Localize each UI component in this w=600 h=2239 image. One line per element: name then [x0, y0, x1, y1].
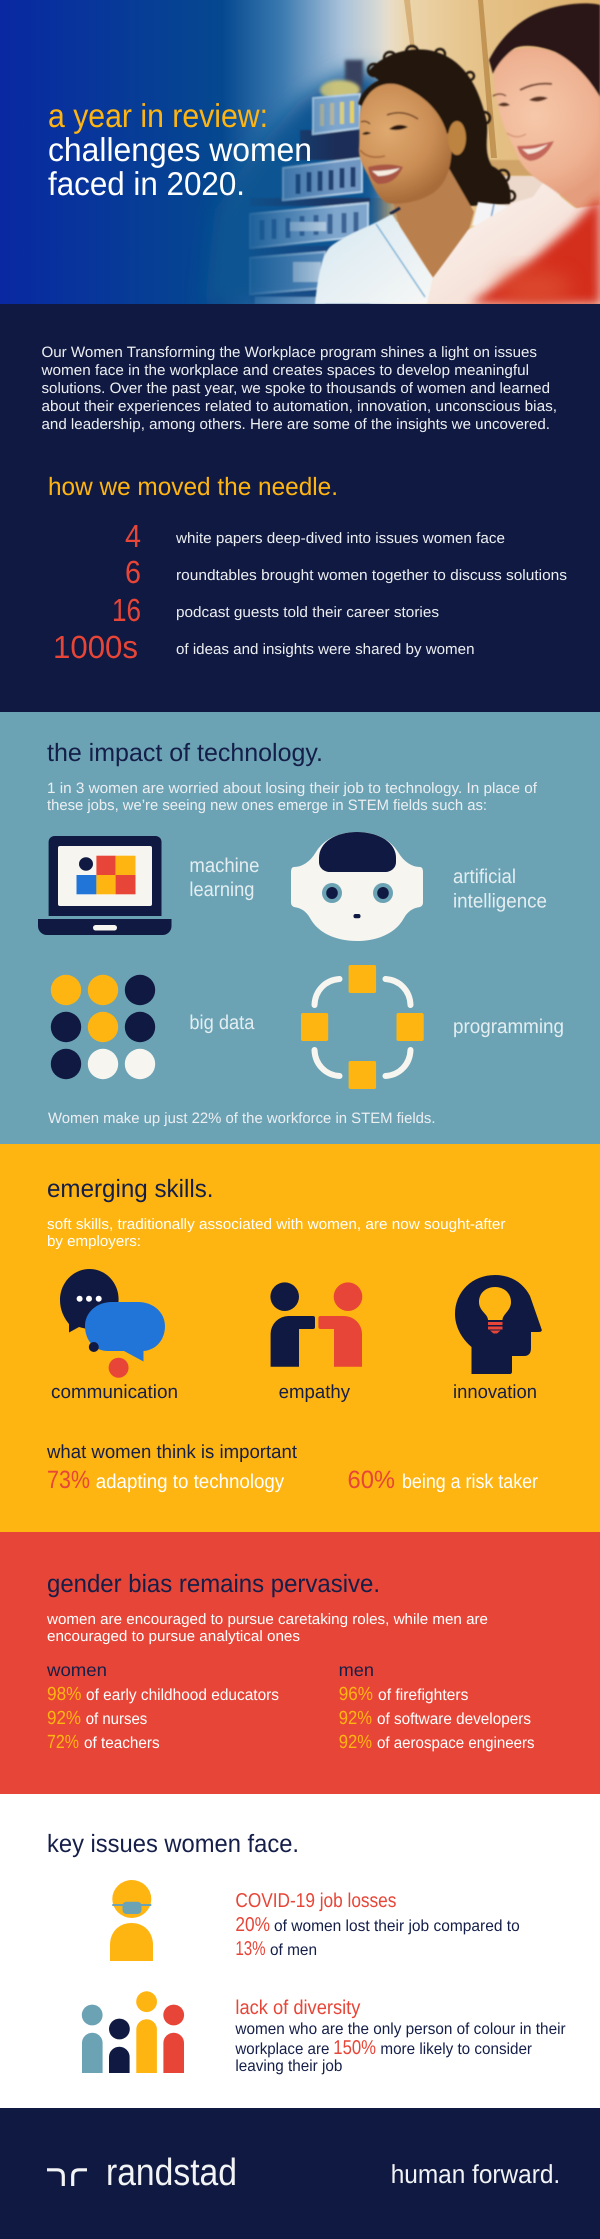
logo mark — [47, 2170, 87, 2186]
stat: being a risk taker: 60% — [348, 1466, 395, 1494]
stat list: 16 — [112, 592, 141, 628]
stat list: of ideas and insights were shared by women — [176, 641, 474, 658]
column: men: 92% — [339, 1708, 372, 1729]
panel: hero — [0, 0, 600, 306]
red foreground blur — [470, 196, 600, 306]
icon: head with light bulb — [455, 1275, 542, 1374]
stat: adapting to technology: 73% — [47, 1466, 90, 1494]
column: men: 96% — [339, 1684, 373, 1705]
stat: being a risk taker: being a risk taker — [402, 1471, 538, 1493]
text: covid-19 job losses: of men — [270, 1942, 317, 1959]
label: artificial intelligence: intelligence — [453, 890, 547, 912]
stat list: 1000s — [53, 629, 138, 665]
column: women: women — [46, 1660, 107, 1680]
stat list: 6 — [125, 554, 141, 590]
intro paragraph: and leadership, among others. Here are some of the insights we uncovered. — [42, 416, 550, 433]
label: communication: communication — [51, 1382, 178, 1403]
label: programming: programming — [453, 1016, 564, 1038]
intro paragraph: Our Women Transforming the Workplace program shines a light on issues — [42, 344, 537, 361]
text: covid-19 job losses: COVID-19 job losses — [235, 1890, 396, 1912]
column: men — [339, 1660, 535, 1753]
stat list: roundtables brought women together to discuss solutions — [176, 567, 567, 584]
column: women: of early childhood educators — [86, 1687, 279, 1704]
column: men: men — [339, 1660, 374, 1680]
hero title: challenges women — [48, 131, 312, 168]
stat: adapting to technology: adapting to technology — [96, 1471, 284, 1493]
text: lack of diversity: lack of diversity — [235, 1997, 360, 2019]
uniforms — [315, 183, 600, 304]
panel: the impact of technology — [0, 712, 600, 1144]
intro paragraph — [40, 344, 557, 433]
panel: emerging skills — [0, 1144, 600, 1532]
label: machine learning: learning — [189, 879, 254, 901]
icon: person wearing mask — [110, 1880, 153, 1961]
paragraph: by employers: — [47, 1233, 141, 1250]
heading: emerging skills. — [47, 1175, 214, 1203]
icon: programming cycle — [301, 965, 424, 1089]
hero photo: two women in a server room — [0, 0, 600, 306]
paragraph — [47, 780, 538, 814]
label: artificial intelligence: artificial — [453, 866, 516, 888]
icon: laptop — [38, 836, 172, 935]
heading: gender bias remains pervasive. — [47, 1570, 380, 1598]
paragraph: these jobs, we’re seeing new ones emerge in STEM fields such as: — [47, 797, 487, 814]
hero title: a year in review: — [48, 97, 268, 134]
intro paragraph: solutions. Over the past year, we spoke to thousands of women and learned — [42, 380, 550, 397]
heading: how we moved the needle: how we moved the needle. — [48, 473, 338, 501]
icon: robot head — [291, 832, 423, 941]
column: men: of software developers — [377, 1711, 531, 1728]
label: big data: big data — [189, 1012, 255, 1034]
column: men: of firefighters — [378, 1687, 468, 1704]
hero title: faced in 2020. — [48, 165, 245, 202]
column: men: of aerospace engineers — [377, 1735, 535, 1752]
column: women: 72% — [47, 1732, 79, 1753]
intro paragraph: women face in the workplace and creates spaces to develop meaningful — [40, 362, 529, 379]
label: machine learning — [189, 855, 259, 901]
icon: empathy figures — [270, 1282, 362, 1367]
column: women: 92% — [47, 1708, 81, 1729]
text: covid-19 job losses — [235, 1890, 520, 1960]
text: lack of diversity: workplace are — [234, 2041, 329, 2058]
text: lack of diversity: 150% — [333, 2037, 376, 2059]
text: lack of diversity: women who are the only person of colour in their — [234, 2021, 566, 2038]
paragraph: encouraged to pursue analytical ones — [47, 1628, 300, 1645]
stem statistic: Women make up just 22% of the workforce in STEM fields. — [48, 1110, 436, 1127]
column: women: 98% — [47, 1684, 82, 1705]
stat list: 4 — [125, 518, 141, 554]
stat: adapting to technology — [47, 1466, 284, 1494]
hero title — [48, 103, 310, 196]
stat list: white papers deep-dived into issues women face — [175, 530, 505, 547]
text: lack of diversity: leaving their job — [235, 2058, 342, 2075]
woman two — [489, 3, 600, 208]
logo wordmark: randstad: randstad — [106, 2152, 237, 2194]
text: lack of diversity: more likely to consider — [380, 2041, 533, 2058]
paragraph: soft skills, traditionally associated with women, are now sought-after — [47, 1216, 506, 1233]
subheading: what women think is important: what women think is important — [46, 1442, 298, 1463]
panel: gender bias remains pervasive — [0, 1532, 600, 1794]
text: covid-19 job losses: 13% — [235, 1938, 266, 1960]
label: machine learning: machine — [189, 855, 259, 877]
stat list: podcast guests told their career stories — [176, 604, 439, 621]
paragraph: women are encouraged to pursue caretaking roles, while men are — [46, 1611, 488, 1628]
text: covid-19 job losses: of women lost their job compared to — [274, 1918, 520, 1935]
heading: key issues women face. — [47, 1830, 299, 1858]
woman one — [358, 46, 515, 278]
tagline: human forward: human forward. — [391, 2159, 560, 2189]
text: covid-19 job losses: 20% — [235, 1914, 270, 1936]
label: innovation: innovation — [453, 1382, 537, 1403]
paragraph — [46, 1611, 488, 1645]
label: empathy: empathy — [279, 1382, 351, 1403]
heading: the impact of technology. — [47, 739, 323, 767]
icon: diverse group of people — [82, 1991, 184, 2073]
text: lack of diversity — [234, 1997, 566, 2075]
column: women — [46, 1660, 279, 1753]
icon: big data dots — [51, 975, 155, 1079]
stat: being a risk taker — [348, 1466, 538, 1494]
column: women: of teachers — [84, 1735, 160, 1752]
panel: key issues women face — [0, 1794, 600, 2108]
intro paragraph: about their experiences related to automation, innovation, unconscious bias, — [42, 398, 557, 415]
label: artificial intelligence — [453, 866, 547, 912]
stat list — [53, 518, 567, 665]
column: women: of nurses — [86, 1711, 147, 1728]
column: men: 92% — [339, 1732, 372, 1753]
paragraph: 1 in 3 women are worried about losing their job to technology. In place of — [47, 780, 538, 797]
panel: footer — [0, 2108, 600, 2239]
paragraph — [47, 1216, 506, 1250]
panel: introduction and how we moved the needle — [0, 304, 600, 712]
icon: speech bubbles — [60, 1269, 165, 1378]
